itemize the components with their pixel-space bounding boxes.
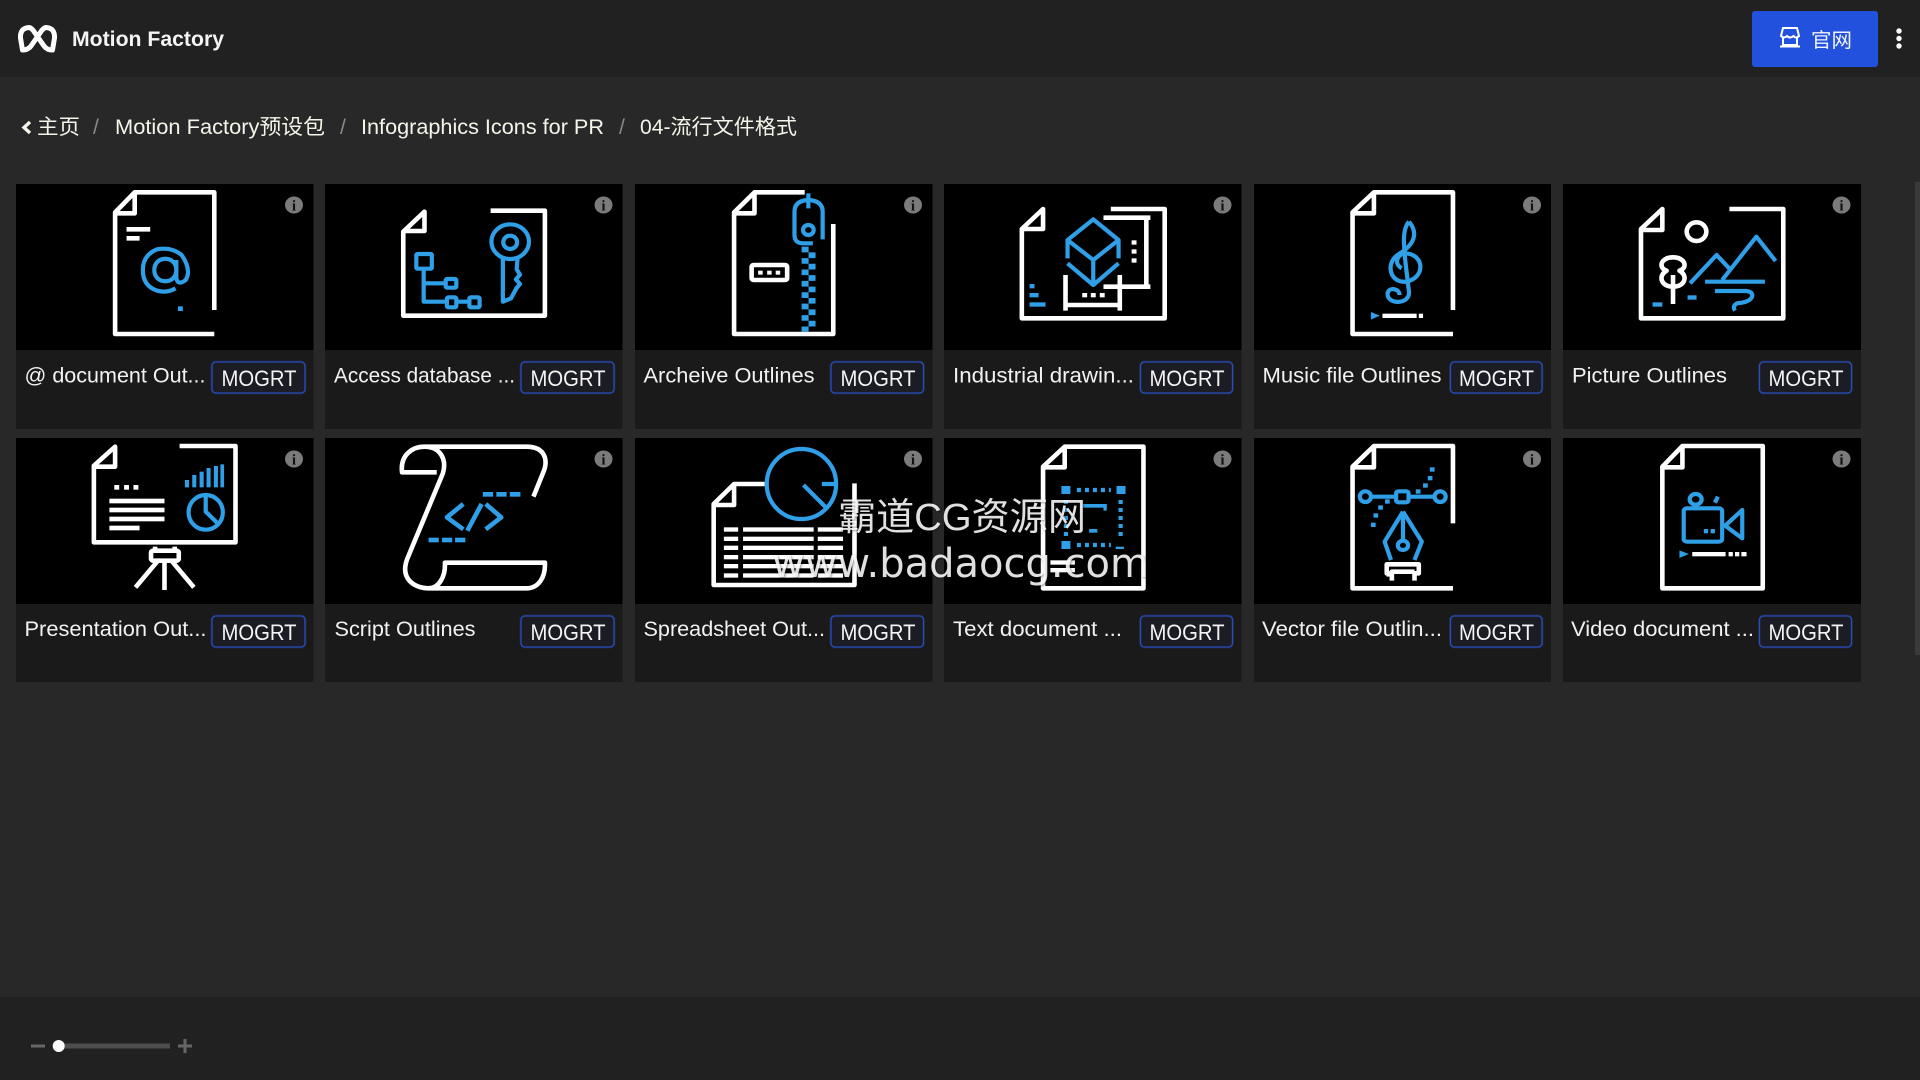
MOGRT button: MOGRT — [1150, 366, 1224, 391]
breadcrumb — [24, 116, 797, 139]
icon: music file — [1353, 192, 1453, 334]
card title: Presentation Out... — [24, 618, 206, 641]
breadcrumb: Motion Factory预设包 — [115, 116, 325, 139]
card title: Picture Outlines — [1572, 364, 1727, 388]
breadcrumb: 04-流行文件格式 — [640, 116, 797, 139]
info icon — [1214, 450, 1232, 468]
icon: industrial drawing — [1022, 209, 1165, 318]
card: Script Outlines — [325, 438, 622, 682]
MOGRT button: MOGRT — [222, 366, 296, 391]
card title: Script Outlines — [334, 618, 476, 641]
icon: more menu — [1896, 28, 1902, 49]
scrollbar — [1915, 182, 1920, 655]
card: Vector file Outlines — [1254, 438, 1551, 682]
card title: Video document ... — [1571, 618, 1754, 641]
icon: presentation board — [94, 446, 236, 590]
bottom toolbar with zoom slider — [0, 997, 1920, 1080]
card title: Text document ... — [953, 618, 1122, 641]
info icon — [1523, 450, 1541, 468]
info icon — [285, 450, 303, 468]
icon: zoom out — [31, 1044, 45, 1048]
icon: zip archive — [734, 192, 833, 334]
MOGRT button: MOGRT — [530, 366, 606, 391]
info icon: i — [1530, 452, 1534, 468]
MOGRT button: MOGRT — [840, 620, 916, 645]
slider knob — [53, 1040, 65, 1052]
card title: Industrial drawin... — [953, 364, 1134, 388]
info icon — [594, 196, 612, 214]
icon: vector file — [1353, 446, 1453, 588]
card: Archeive Outlines — [635, 184, 932, 429]
card: Picture Outlines — [1563, 184, 1861, 429]
icon: store — [1780, 28, 1800, 46]
icon: at-sign document — [115, 192, 214, 334]
card: Presentation Outlines — [16, 438, 314, 682]
info icon — [1832, 196, 1850, 214]
info icon — [1832, 450, 1850, 468]
MOGRT button: MOGRT — [1150, 620, 1224, 645]
breadcrumb: / — [619, 116, 625, 139]
breadcrumb: 主页 — [37, 116, 80, 139]
breadcrumb: / — [93, 116, 99, 139]
MOGRT button: MOGRT — [1459, 366, 1534, 391]
card title: Music file Outlines — [1262, 364, 1442, 388]
card: Industrial drawing — [944, 184, 1242, 429]
MOGRT button: MOGRT — [840, 366, 916, 391]
info icon: i — [1839, 452, 1844, 468]
info icon — [1214, 196, 1232, 214]
watermark: 霸道CG资源网 — [838, 497, 1086, 539]
info icon — [594, 450, 612, 468]
info icon: i — [911, 452, 915, 468]
info icon: i — [1220, 452, 1225, 468]
info icon: i — [1530, 198, 1534, 214]
MOGRT button: MOGRT — [1768, 620, 1844, 645]
info icon: i — [1220, 198, 1225, 214]
card: Access database — [325, 184, 622, 429]
icon: zoom in — [178, 1039, 192, 1053]
card: Text document Outlines — [944, 438, 1242, 682]
icon: picture file — [1641, 209, 1783, 318]
info icon: i — [1839, 198, 1844, 214]
MOGRT button: MOGRT — [1768, 366, 1844, 391]
card title: Archeive Outlines — [644, 364, 814, 388]
info icon: i — [292, 452, 296, 468]
info icon: i — [292, 198, 296, 214]
info icon: i — [911, 198, 915, 214]
top navigation bar — [0, 0, 1920, 77]
card: Music file Outlines — [1254, 184, 1551, 429]
brand name: Motion Factory — [72, 28, 224, 51]
card title: Spreadsheet Out... — [644, 618, 825, 641]
breadcrumb: Infographics Icons for PR — [361, 116, 604, 139]
card title: Access database ... — [334, 364, 515, 388]
official site button — [1752, 11, 1878, 67]
icon: script scroll — [402, 447, 546, 588]
info icon — [285, 196, 303, 214]
info icon — [904, 196, 922, 214]
MOGRT button: MOGRT — [222, 620, 296, 645]
watermark — [772, 497, 1149, 587]
card: Video document Outlines — [1563, 438, 1861, 682]
info icon: i — [601, 452, 606, 468]
icon: database key — [403, 211, 545, 316]
MOGRT button: MOGRT — [530, 620, 606, 645]
slider track — [58, 1044, 170, 1048]
card title: Vector file Outlin... — [1262, 618, 1442, 641]
MOGRT button: MOGRT — [1459, 620, 1534, 645]
button label: 官网 — [1811, 29, 1852, 52]
card: Spreadsheet Outlines — [635, 438, 932, 682]
icon: Motion Factory logo — [20, 28, 55, 50]
info icon: i — [601, 198, 606, 214]
card title: @ document Out... — [24, 364, 206, 388]
icon: video document — [1662, 446, 1763, 588]
icon: text document — [1043, 447, 1143, 588]
card: @ document Outlines — [16, 184, 314, 429]
icon: spreadsheet — [714, 449, 854, 585]
info icon — [1523, 196, 1541, 214]
info icon — [904, 450, 922, 468]
watermark: www.badaocg.com — [772, 541, 1149, 587]
breadcrumb: / — [340, 116, 346, 139]
